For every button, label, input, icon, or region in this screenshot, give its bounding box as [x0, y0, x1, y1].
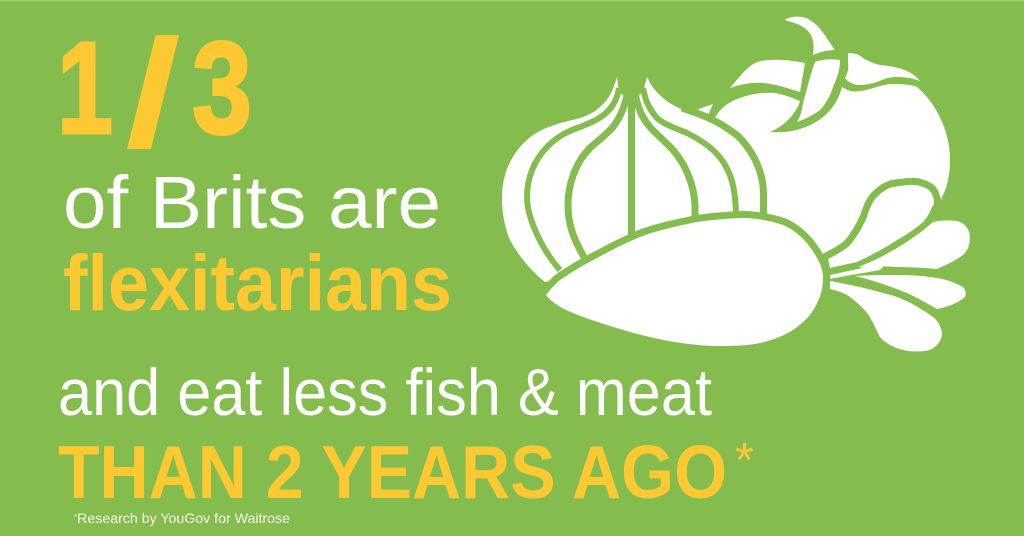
- asterisk: *: [735, 434, 754, 487]
- carrot leaf lower right: [855, 275, 966, 309]
- icon: carrot: [546, 185, 934, 346]
- tomato centre leaf: [797, 59, 840, 122]
- onion layer lines: [527, 88, 764, 270]
- heading: 1/3: [57, 8, 252, 179]
- carrot root: [546, 218, 823, 346]
- heading: 1/3: /: [125, 8, 181, 179]
- text: than 2 years ago: THAN 2 YEARS AGO: [58, 430, 727, 514]
- tomato stem: [785, 17, 835, 55]
- icon: onion: [502, 77, 770, 282]
- footnote: *: [74, 513, 77, 522]
- tomato left leaf: [730, 60, 805, 92]
- carrot leaves: [830, 220, 970, 352]
- heading: 1/3: 3: [192, 14, 252, 161]
- heading: 1/3: 1: [57, 14, 113, 161]
- carrot leaf upper right: [858, 220, 970, 269]
- icon: tomato: [690, 17, 950, 280]
- illustration: vegetables: [502, 17, 970, 352]
- tomato sliver behind onion: [690, 104, 713, 115]
- footnote: Research by YouGov for Waitrose: [77, 510, 290, 526]
- text: flexitarians: flexitarians: [63, 238, 452, 327]
- tomato body: [708, 84, 950, 280]
- text: of Brits are: of Brits are: [63, 161, 441, 244]
- text: and eat less fish and meat: and eat less fish & meat: [58, 355, 712, 429]
- onion silhouette: [502, 77, 770, 282]
- carrot leaf bottom: [830, 281, 942, 352]
- carrot leaf top: [828, 185, 934, 268]
- tomato right leaf: [845, 53, 920, 85]
